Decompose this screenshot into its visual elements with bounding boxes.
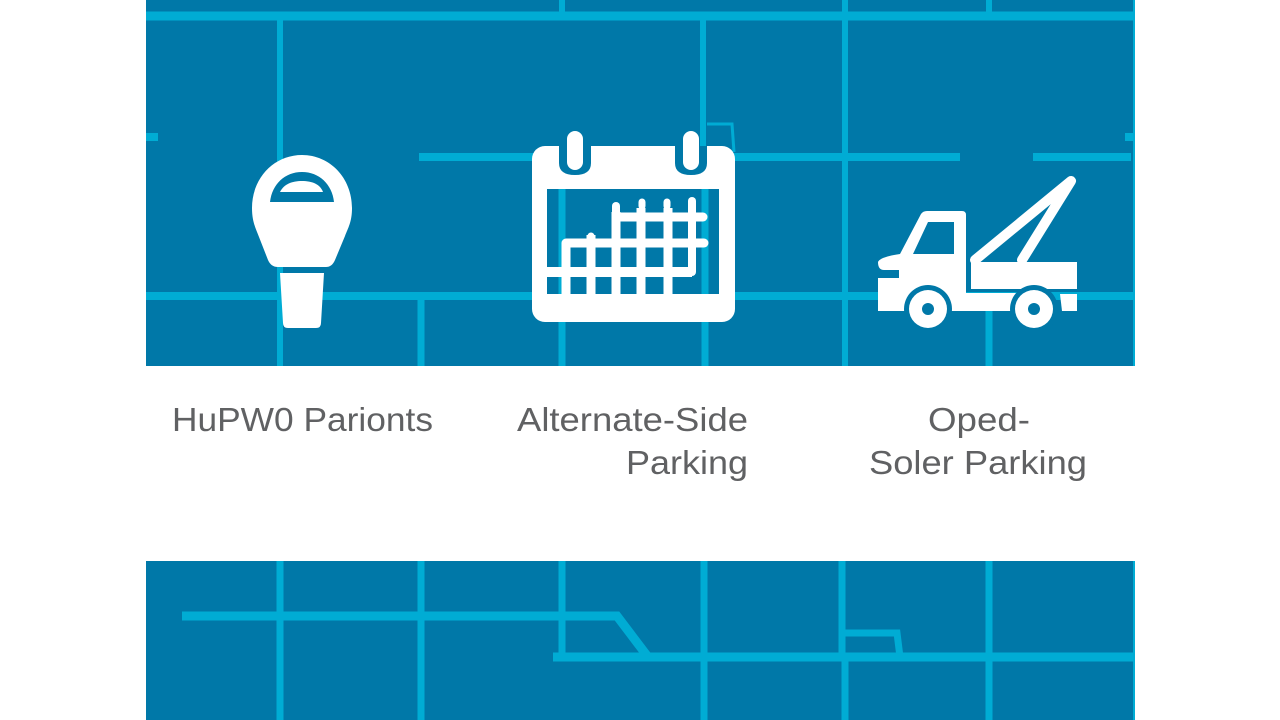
panel: top street map <box>146 0 1135 366</box>
panel: bottom street map <box>146 561 1135 720</box>
icon: tow truck <box>878 181 1077 333</box>
label: first parking type: HuPW0 Parionts <box>172 401 433 438</box>
icon: parking meter <box>252 155 352 328</box>
label: alternate-side parking: Parking <box>626 444 748 481</box>
icon: calendar <box>532 131 735 322</box>
label: alternate-side parking: Alternate-Side <box>517 401 748 438</box>
label: third parking type <box>869 401 1087 481</box>
label: third parking type: Oped- <box>928 401 1030 438</box>
label: alternate-side parking <box>517 401 748 481</box>
label: third parking type: Soler Parking <box>869 444 1087 481</box>
